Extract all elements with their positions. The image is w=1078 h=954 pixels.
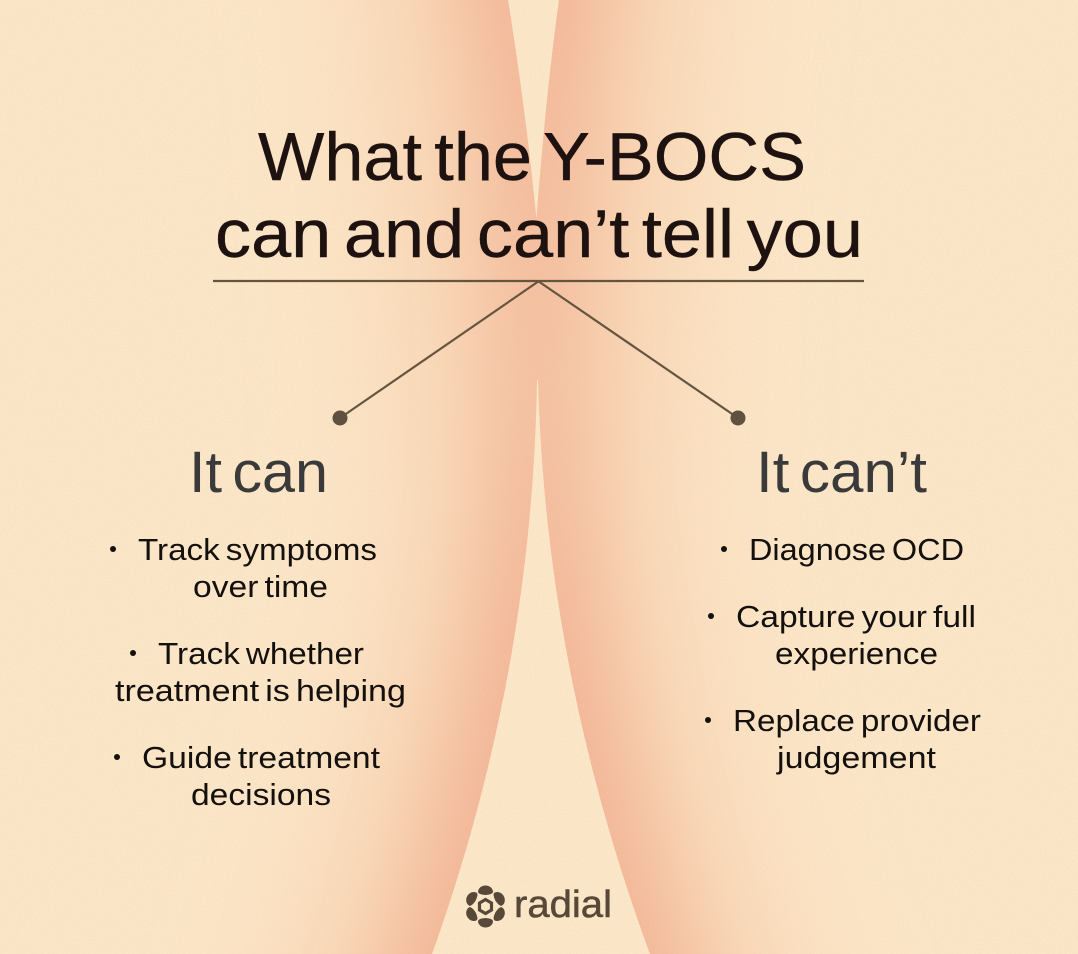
title: What the Y-BOCS	[258, 119, 806, 195]
title	[215, 119, 863, 272]
list: it can't items: Capture your full	[736, 599, 976, 634]
heading: it can't: It can’t	[756, 440, 927, 505]
list: it can't items: judgement	[776, 740, 936, 775]
list: it can items: Track whether	[158, 636, 364, 671]
list: it can items: Track symptoms	[138, 532, 377, 567]
connector lines and endpoints	[213, 281, 864, 426]
list: it can items: decisions	[191, 777, 331, 812]
list: it can't items: experience	[775, 636, 938, 671]
wordmark: radial	[514, 884, 612, 926]
list: it can items: Guide treatment	[142, 740, 380, 775]
list: it can items	[110, 532, 406, 812]
heading: it can: It can	[189, 440, 328, 505]
panel: it can	[110, 440, 406, 812]
list: it can't items	[705, 532, 981, 775]
list: it can items: over time	[193, 569, 328, 604]
icon: radial flower	[464, 886, 507, 928]
title: can and can’t tell you	[215, 196, 863, 272]
list: it can't items: Replace provider	[733, 703, 981, 738]
list: it can't items: Diagnose OCD	[749, 532, 964, 567]
panel: it can't	[705, 440, 981, 775]
list: it can items: treatment is helping	[115, 673, 406, 708]
logo: radial	[464, 884, 612, 928]
